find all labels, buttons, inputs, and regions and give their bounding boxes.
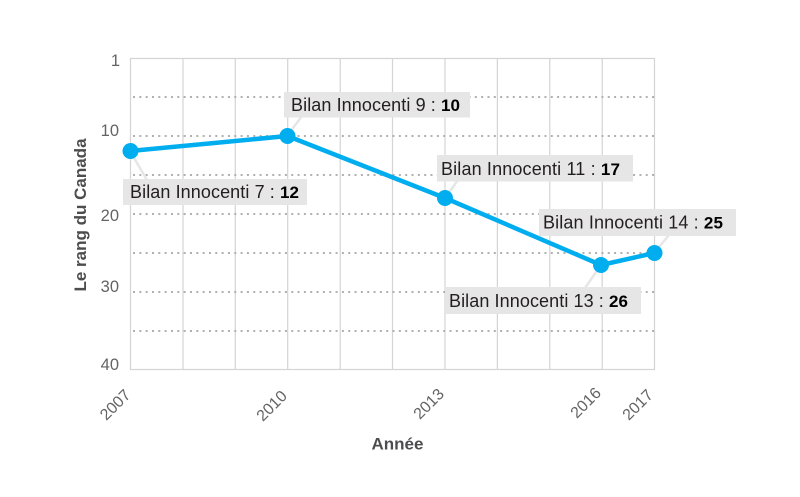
y axis title: Le rang du Canada: [71, 138, 90, 292]
x axis labels: 2007: [97, 387, 134, 424]
plot grid: [130, 58, 655, 370]
leader lines: [130, 116, 669, 288]
y axis labels: 30: [101, 278, 119, 296]
callout: Bilan Innocenti 13: [445, 287, 641, 314]
y axis labels: 1: [111, 52, 120, 70]
x axis labels: 2017: [620, 387, 657, 424]
x axis labels: 2013: [411, 386, 448, 423]
y axis labels: 10: [101, 122, 119, 140]
callout: Bilan Innocenti 14: Bilan Innocenti 14 : 25: [543, 212, 723, 232]
x axis title: Année: [372, 434, 423, 454]
data line: [130, 136, 654, 265]
callout: Bilan Innocenti 11: [437, 155, 633, 182]
x axis labels: [97, 385, 657, 425]
y axis labels: 40: [101, 356, 119, 374]
x axis labels: 2016: [568, 385, 605, 422]
data points: [122, 128, 662, 273]
callout: Bilan Innocenti 14: [539, 209, 736, 236]
y axis labels: 20: [101, 207, 119, 225]
callout: Bilan Innocenti 13: Bilan Innocenti 13 : 26: [449, 291, 628, 311]
y axis labels: [101, 52, 120, 374]
callout: Bilan Innocenti 11: Bilan Innocenti 11 : 17: [441, 159, 620, 179]
x axis labels: 2010: [254, 388, 291, 425]
callout: Bilan Innocenti 7: Bilan Innocenti 7 : 12: [130, 182, 299, 202]
callout: Bilan Innocenti 9: Bilan Innocenti 9 : 10: [291, 95, 460, 115]
